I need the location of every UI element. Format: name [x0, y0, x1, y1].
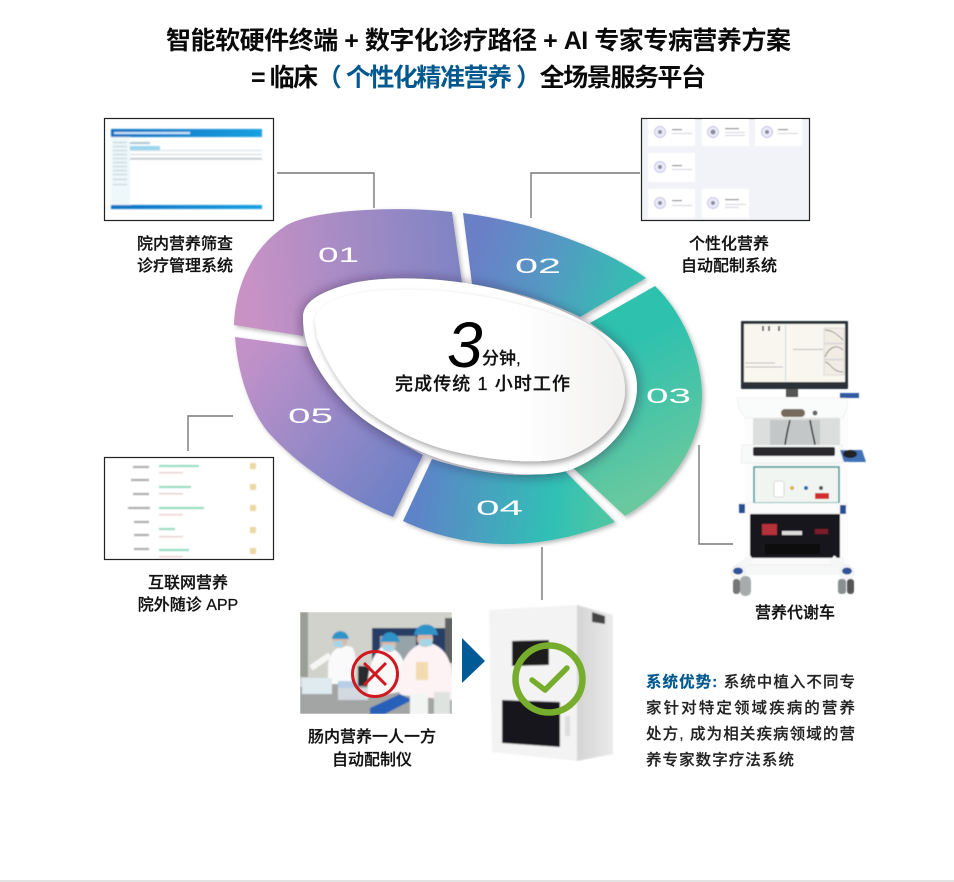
label: internet app: 互联网营养: [148, 574, 228, 592]
connector line: system 01: [277, 173, 374, 208]
label: dispenser: 肠内营养一人一方: [308, 727, 436, 746]
text block: system advantages: 养专家数字疗法系统: [646, 750, 794, 769]
connector line: system 04: [541, 547, 543, 600]
label: screening system: [137, 234, 233, 275]
keyboard shelf: [741, 445, 843, 463]
connector line: system 02: [531, 173, 640, 218]
screenshot: internet app: [104, 458, 274, 560]
top shelf: [737, 398, 848, 418]
label: personalized system: [681, 235, 777, 275]
title: 智能软硬件终端 + 数字化诊疗路径 + AI 专家专病营养方案: [166, 26, 791, 55]
device: automated dispenser: [489, 605, 613, 761]
text block: system advantages: [646, 672, 855, 769]
center text: [395, 309, 570, 394]
analyzer box: [754, 467, 839, 503]
arrow: [462, 638, 485, 683]
label: screening system: 诊疗管理系统: [137, 256, 233, 275]
printer: [750, 514, 840, 558]
connector line: system 05: [188, 416, 233, 451]
title: [166, 26, 791, 92]
icon: red prohibited mark: [352, 652, 398, 696]
screenshot: nutrition screening system: [104, 118, 274, 220]
label: personalized system: 自动配制系统: [681, 257, 777, 275]
footer bar: [111, 205, 262, 209]
label: dispenser: [308, 727, 436, 769]
cart frame interior: [745, 405, 845, 575]
center text: 3: [447, 309, 483, 381]
label: personalized system: 个性化营养: [689, 235, 769, 253]
label: screening system: 院内营养筛查: [137, 234, 233, 253]
header bar: [111, 129, 262, 137]
segment 02: [463, 213, 646, 317]
segment 03: [572, 286, 702, 516]
label: internet app: [138, 574, 238, 614]
label 01: 01: [318, 244, 359, 267]
segment 04: [403, 459, 615, 544]
mouse pad: [840, 450, 866, 462]
label 05: 05: [288, 405, 333, 428]
segment 05: [235, 337, 423, 517]
monitor: [741, 321, 848, 389]
monitor stand: [786, 389, 798, 397]
icon: green check mark: [516, 646, 582, 712]
photo: manual preparation: [300, 612, 453, 714]
label: dispenser: 自动配制仪: [332, 751, 412, 769]
connector line: system 03: [699, 445, 733, 544]
title: = 临床（ 个性化精准营养 ）全场景服务平台: [251, 63, 706, 92]
label 03: 03: [646, 385, 691, 408]
label 04: 04: [476, 497, 524, 520]
label: internet app: 院外随诊 APP: [138, 595, 238, 614]
label 02: 02: [515, 255, 561, 278]
metabolic cart: [731, 321, 866, 596]
segment 01: [234, 209, 462, 336]
base and casters: [740, 558, 843, 570]
center blob outer: [303, 278, 637, 474]
text block: system advantages: 系统优势: 系统中植入不同专: [646, 672, 855, 691]
label: metabolic cart: 营养代谢车: [755, 604, 835, 622]
text block: system advantages: 处方, 成为相关疾病领域的营: [646, 724, 855, 743]
ring diagram: [234, 209, 702, 544]
lower shelf: [741, 503, 848, 513]
sidebar: [111, 137, 130, 205]
center text: 分钟,: [482, 349, 521, 368]
screenshot: personalized nutrition system: [642, 118, 810, 220]
center text: 完成传统 1 小时工作: [395, 374, 570, 394]
text block: system advantages: 家针对特定领域疾病的营养: [646, 698, 855, 717]
center blob inner: [315, 290, 625, 461]
